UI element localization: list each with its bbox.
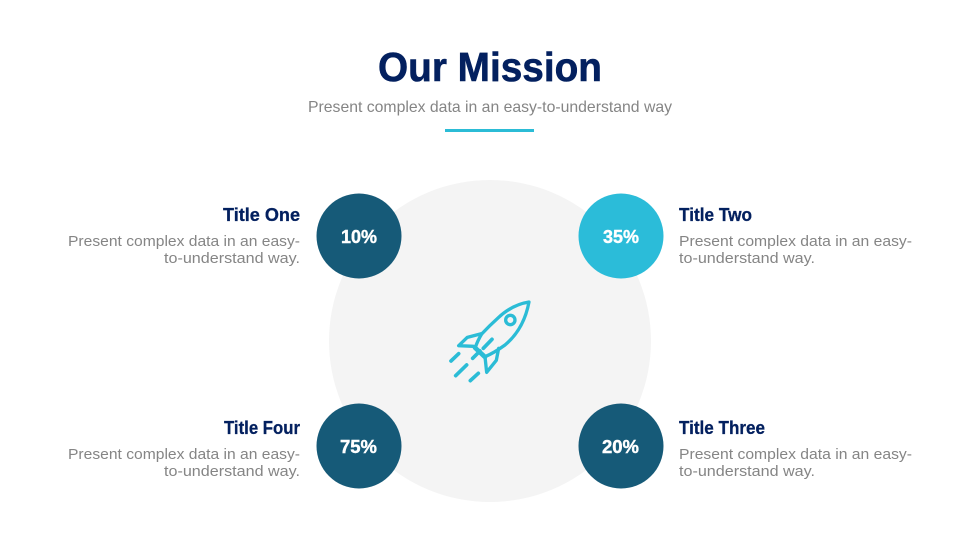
- description: title three: [679, 446, 912, 480]
- description: title four: to-understand way.: [164, 463, 300, 480]
- heading: title three: Title Three: [679, 418, 765, 438]
- description: title one: [68, 233, 300, 267]
- description: title two: Present complex data in an easy-: [679, 233, 912, 250]
- title: Our Mission: [378, 44, 602, 90]
- circle: 10%: 10%: [341, 227, 377, 247]
- circle: 75%: 75%: [340, 437, 377, 457]
- circle: 75%: [316, 404, 402, 488]
- heading: title two: Title Two: [679, 205, 752, 225]
- circle: 10%: [316, 194, 402, 278]
- title underline: [445, 129, 534, 132]
- item: title one: [68, 194, 402, 278]
- description: title three: to-understand way.: [679, 463, 815, 480]
- description: title two: [679, 233, 912, 267]
- circle: 35%: [578, 194, 664, 278]
- circle: 35%: 35%: [603, 227, 639, 247]
- item: title four: [68, 404, 402, 488]
- description: title four: Present complex data in an easy-: [68, 446, 300, 463]
- heading: title four: Title Four: [224, 418, 300, 438]
- description: title three: Present complex data in an easy-: [679, 446, 912, 463]
- circle: 20%: 20%: [602, 437, 639, 457]
- description: title two: to-understand way.: [679, 250, 815, 267]
- central background circle: [329, 180, 651, 502]
- description: title one: to-understand way.: [164, 250, 300, 267]
- heading: title one: Title One: [223, 205, 300, 225]
- subtitle: Present complex data in an easy-to-understand way: [308, 99, 672, 116]
- item: title three: [578, 404, 912, 488]
- description: title one: Present complex data in an easy-: [68, 233, 300, 250]
- item: title two: [578, 194, 912, 278]
- icon: rocket: [451, 302, 529, 381]
- circle: 20%: [578, 404, 664, 488]
- description: title four: [68, 446, 300, 480]
